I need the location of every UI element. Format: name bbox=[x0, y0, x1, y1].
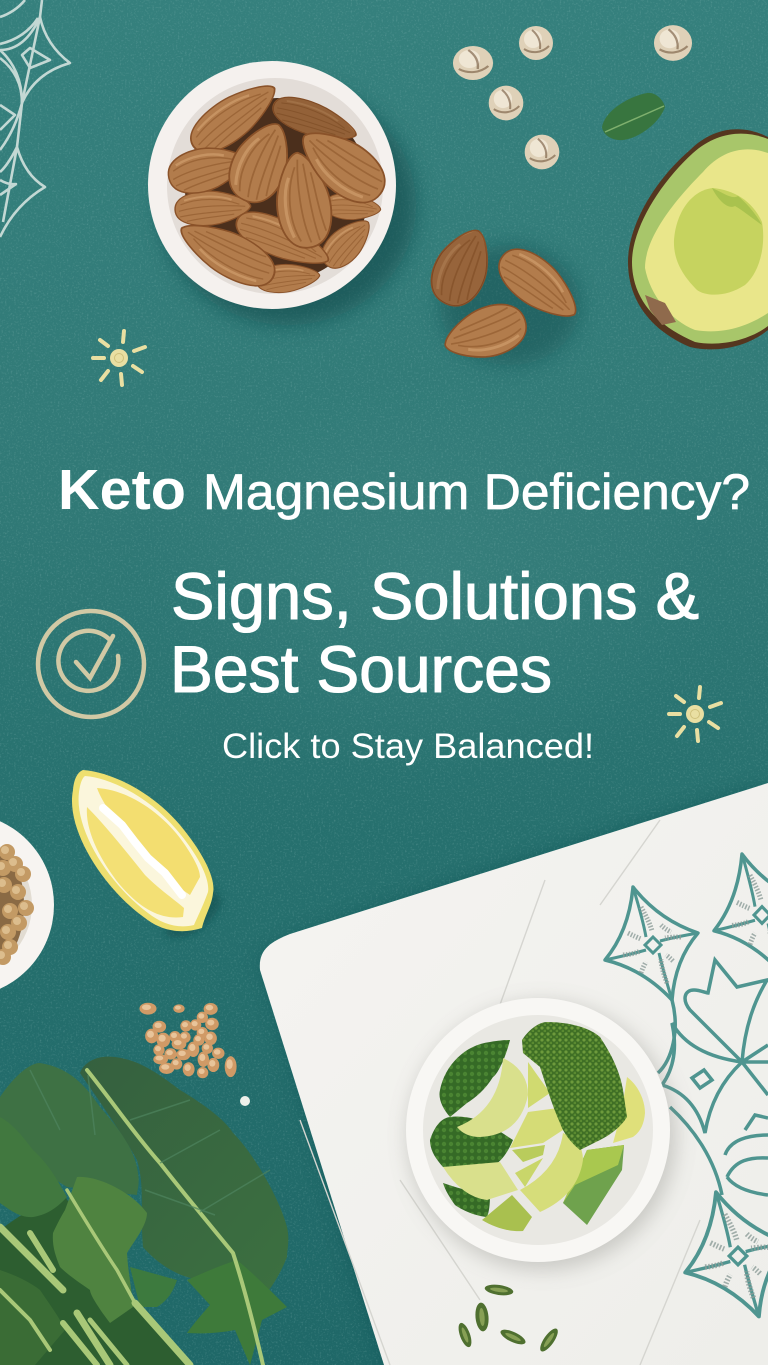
bowl of broccoli and avocado bbox=[406, 998, 676, 1270]
small green leaf bbox=[602, 93, 665, 140]
leafy greens bbox=[0, 1057, 288, 1365]
bowl of almonds bbox=[148, 61, 416, 325]
left bowl of chickpeas bbox=[0, 813, 54, 997]
white seed bbox=[240, 1096, 250, 1106]
pumpkin seeds bbox=[456, 1283, 561, 1354]
subtitle: Best Sources bbox=[170, 632, 552, 706]
sparkle right bbox=[669, 687, 721, 741]
title line: Keto bbox=[58, 458, 186, 522]
scattered seeds bbox=[139, 1003, 237, 1078]
subtitle bbox=[170, 559, 699, 706]
call to action: Click to Stay Balanced! bbox=[222, 727, 594, 766]
lemon wedge bbox=[72, 770, 222, 938]
marble cutting board bbox=[260, 783, 768, 1365]
avocado half bbox=[628, 129, 768, 349]
check badge icon bbox=[38, 611, 144, 717]
loose almonds bbox=[422, 220, 589, 369]
decorative line ornament top left bbox=[0, 0, 70, 237]
sparkle left bbox=[93, 331, 145, 385]
hazelnuts bbox=[453, 25, 692, 169]
decorative teal ornament on board bbox=[605, 854, 768, 1316]
title line bbox=[58, 458, 750, 522]
title line: Magnesium Deficiency? bbox=[203, 464, 750, 520]
subtitle: Signs, Solutions & bbox=[171, 559, 699, 633]
